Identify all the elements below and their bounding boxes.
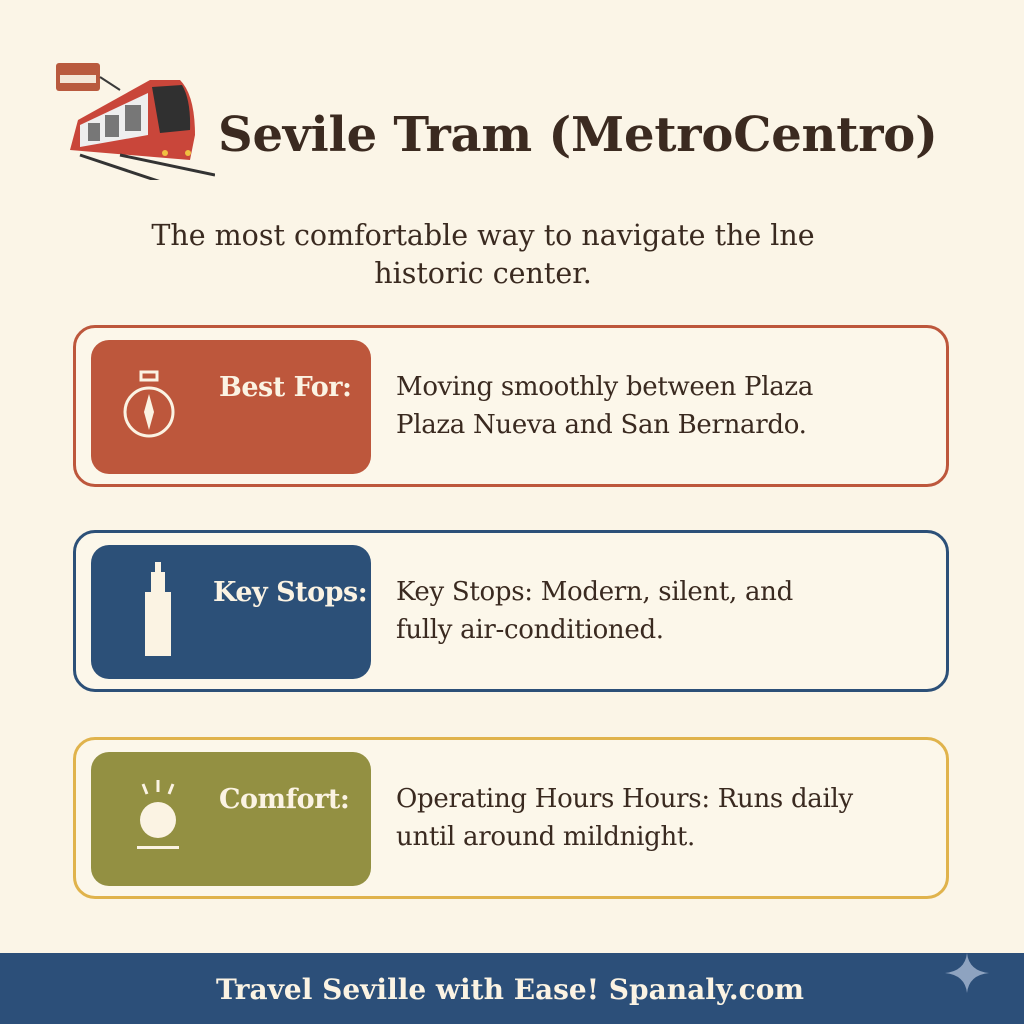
icon: sparkle [946,953,988,992]
text: key stops: Key Stops: Modern, silent, and [396,577,793,607]
tag: best for: Best For: [219,372,351,403]
footer [0,953,1024,1024]
icon: fan [137,780,179,849]
text: key stops: fully air-conditioned. [396,615,664,645]
tag: key stops [91,545,371,679]
text: comfort: until around mildnight. [396,822,695,852]
icon: giralda [145,562,171,656]
text: key stops [396,577,793,645]
panel: comfort [73,737,949,899]
subtitle: historic center. [374,257,592,290]
panel: best for [73,325,949,487]
tag: comfort: Comfort: [219,784,349,815]
text: best for: Plaza Nueva and San Bernardo. [396,410,807,440]
text: comfort [396,784,854,852]
tag: key stops: Key Stops: [213,577,367,608]
icon: compass [124,370,174,438]
text: comfort: Operating Hours Hours: Runs daily [396,784,853,814]
panel: key stops [73,530,949,692]
subtitle: The most comfortable way to navigate the lne [151,219,815,252]
subtitle [151,219,815,290]
text: best for [396,372,813,440]
icon: tram [56,63,215,180]
text: best for: Moving smoothly between Plaza [396,372,813,402]
tag: best for [91,340,371,474]
tag: comfort [91,752,371,886]
title: Sevile Tram (MetroCentro) [218,107,938,163]
footer text: Travel Seville with Ease! Spanaly.com [216,973,804,1006]
